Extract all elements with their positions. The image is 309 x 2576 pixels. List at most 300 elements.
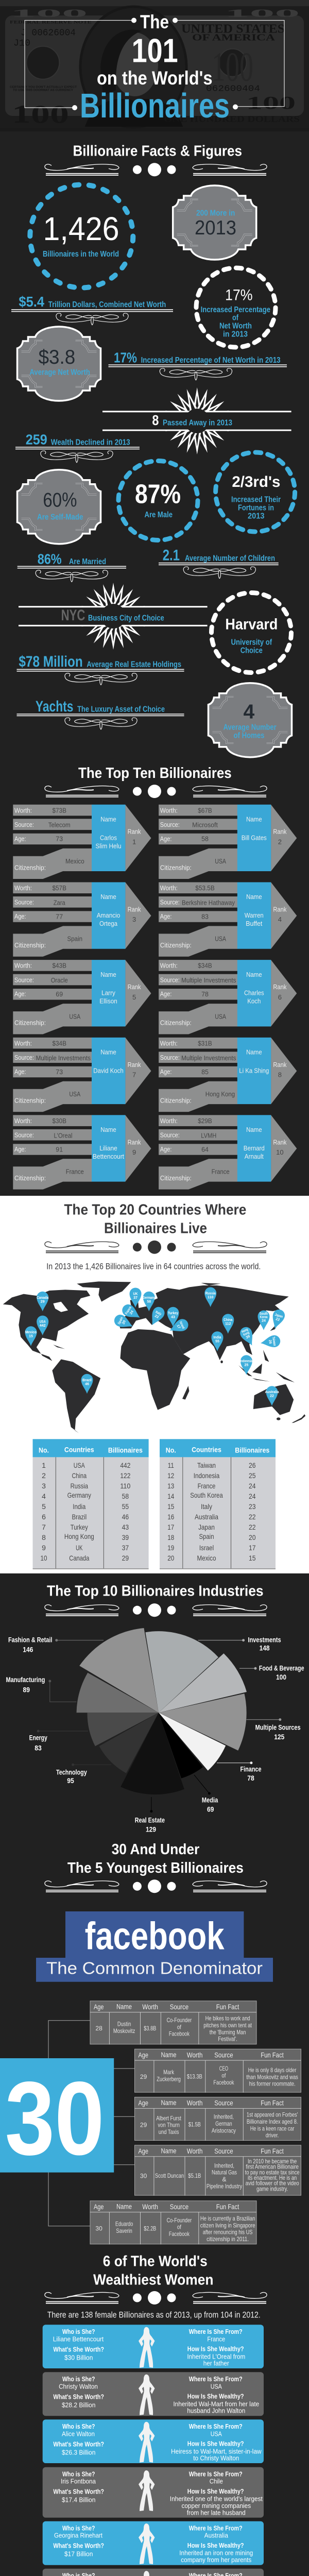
table: Scott Duncan: Age [138,2147,148,2155]
table: Mark Zuckerberg: Zuckerberg [157,2075,181,2082]
card: rank 5 Larry Ellison: 69 [56,990,63,998]
wedge: Multiple Sources [159,1693,247,1751]
table: countries 11-20: 25 [249,1471,256,1480]
fact: 17% increased: 17% [114,349,137,365]
ring: 17%: Increased Percentage [201,306,270,314]
fact: 86% married: 86% [38,551,62,567]
plaque: 200 more in 2013: 200 More in [196,209,235,217]
card: rank 5 Larry Ellison: $43B [52,962,66,970]
row: Iris Fontbona: $17.4 Billion [62,2496,95,2504]
pie labels: Media [202,1795,218,1804]
table: countries 11-20: No. [166,1446,176,1454]
row: Liliane Bettencourt: $30 Billion [64,2353,93,2361]
pin: Hong Kong: 39 [246,1334,251,1340]
leader lines [38,1640,280,1811]
row: Georgina Rinehart: $17 Billion [64,2550,93,2558]
row: Georgina Rinehart: Who is She? [62,2524,95,2532]
card: rank 10 Bernard Arnault: 64 [201,1145,209,1153]
card: rank 5 Larry Ellison: Source: [14,976,34,984]
pin: USA [37,1316,48,1335]
banner: dollar bill with title: UNITED STATES [181,22,285,36]
big 30 block: 30 [5,2060,105,2177]
card: rank 7 David Koch: Worth: [14,1039,32,1047]
burst: 8 passed away: Passed Away in 2013 [163,419,232,428]
ring: 2/3rd's increased: Increased Their [231,495,281,504]
table: Scott Duncan: Inherited, [214,2162,234,2169]
table: Dustin Moskovitz: Festival'. [218,2036,237,2043]
row: Georgina Rinehart: Where Is She From? [189,2524,243,2532]
card: rank 7 David Koch [13,1038,151,1112]
pie labels: Technology [56,1768,87,1776]
card: rank 1 Carlos Slim Helu: Mexico [65,857,84,865]
card: rank 1 Carlos Slim Helu: Citizenship: [14,863,46,871]
plaque: 60% self-made: Are Self-Made [37,513,83,521]
pin: Spain: 20 [122,1320,127,1325]
world map [3,1281,305,1433]
table: Mark Zuckerberg: $13.3B [187,2073,202,2080]
card: rank 6 Charles Koch: 78 [201,990,209,998]
card: rank 1 Carlos Slim Helu: Telecom [48,821,71,829]
table: countries 1-10: Countries [64,1445,94,1453]
card: rank 4 Warren Buffet: Warren [245,911,264,919]
card: rank 7 David Koch: Name [100,1048,116,1056]
card: rank 6 Charles Koch: $34B [198,962,212,970]
pin: USA: 442 [40,1324,46,1328]
ring: 17%: of [232,314,239,323]
banner: dollar bill with title: 100 [246,93,296,113]
table: countries 1-10: 1 [42,1461,46,1469]
table: countries 11-20: 24 [249,1492,256,1500]
pin: Brazil: Brazil [82,1379,92,1382]
card: rank 6 Charles Koch: Multiple Investments [181,976,236,984]
pin: Germany: 58 [147,1300,151,1303]
table: countries 1-10: 37 [122,1544,129,1552]
card: rank 8 Li Ka Shing: Worth: [160,1039,178,1047]
pie labels: 146 [23,1646,33,1654]
card: rank 6 Charles Koch: Source: [160,976,180,984]
card: rank 4 Warren Buffet: Name [246,893,262,901]
card: rank 9 Liliane Bettencourt [13,1115,151,1190]
row: Alice Walton: Alice Walton [62,2430,95,2437]
card: rank 6 Charles Koch [159,960,297,1034]
table: Dustin Moskovitz: He bikes to work and [205,2015,250,2022]
pie labels: Investments [248,1636,281,1644]
row: Georgina Rinehart [43,2521,264,2565]
card: rank 10 Bernard Arnault: Bernard [244,1144,265,1152]
card: rank 6 Charles Koch: Charles [244,989,264,997]
burst: NYC [19,583,208,650]
pin: UK [130,1288,141,1308]
card: rank 6 Charles Koch: Rank [273,983,287,991]
row: Christy Walton: $28.2 Billion [62,2401,95,2409]
ring: 1,426 billionaires [30,184,133,287]
card: rank 8 Li Ka Shing: Citizenship: [160,1096,192,1104]
table: Dustin Moskovitz: pitches his own tent at [203,2022,252,2029]
table: countries 1-10: India [73,1502,85,1511]
row: Liliane Bettencourt: What's She Worth? [53,2345,104,2353]
card: rank 1 Carlos Slim Helu: 73 [56,835,63,843]
table: Eduardo Saverin: 30 [95,2225,102,2232]
pin: Russia: Russia [205,1292,216,1295]
card: rank 10 Bernard Arnault: Age: [160,1145,171,1153]
pin: Turkey [167,1307,179,1327]
pie labels: 69 [207,1805,214,1814]
pie labels: 148 [260,1643,270,1652]
table: Eduardo Saverin: Saverin [116,2227,132,2234]
pie labels: 129 [146,1825,156,1834]
card: rank 3 Amancio Ortega: Age: [14,912,26,920]
fact: 259 wealth declined: 259 [26,432,47,448]
banner: dollar bill with title: J10 [13,38,30,48]
table: Scott Duncan: Fun Fact [261,2147,284,2155]
table: countries 11-20: 11 [168,1461,174,1469]
row: Iris Fontbona [43,2467,264,2518]
card: rank 6 Charles Koch: 6 [278,993,282,1001]
table: Mark Zuckerberg: Name [161,2050,177,2059]
fact: 17% increased [108,349,287,380]
row: Georgina Rinehart: company from her parents [181,2556,252,2564]
table: Eduardo Saverin: Fun Fact [216,2202,239,2211]
table: Eduardo Saverin: Source [170,2202,188,2211]
row: Iris Fontbona: Iris Fontbona [61,2478,96,2485]
ornament divider [45,785,267,798]
heading: 30 and under [67,1841,244,1876]
wedge: Food & Beverage [159,1653,247,1713]
banner: dollar bill with title: 100 [212,45,253,90]
row: Christy Walton: Inherited Wal-Mart from her late [173,2400,259,2408]
card: rank 8 Li Ka Shing: Hong Kong [205,1090,235,1098]
heading: The Top Ten Billionaires: The Top Ten Billionaires [78,765,232,782]
pin: China: 112 [225,1323,231,1326]
fact: $78 million [16,653,184,685]
table: countries 11-20 [160,1439,276,1569]
pin: Indonesia [241,1355,252,1375]
pin: Australia: 22 [270,1395,274,1398]
fact: 2.1 children [159,547,279,579]
pin: Japan: Japan [274,1313,283,1319]
pin: Spain: Spain [117,1316,124,1325]
fact: 2.1 children: Average Number of Children [185,554,275,563]
table: Mark Zuckerberg: Fun Fact [261,2050,284,2059]
card: rank 4 Warren Buffet: Rank [273,905,287,913]
table: Albert von Thurn und Taxis: He is a keen race car [250,2125,294,2132]
fact: 2.1 children: 2.1 [163,547,180,564]
table: Albert von Thurn und Taxis: Aristocracy [212,2127,236,2134]
table: Scott Duncan: $5.1B [188,2172,201,2179]
row: Christy Walton: Christy Walton [59,2382,98,2390]
pin: South Korea: South [260,1312,268,1316]
table: Albert von Thurn und Taxis: Name [161,2098,177,2107]
card: rank 1 Carlos Slim Helu: Worth: [14,806,32,814]
card: rank 9 Liliane Bettencourt: $30B [52,1117,66,1125]
fact: $5.4 trillion [11,294,173,325]
card: rank 9 Liliane Bettencourt: Liliane [99,1144,117,1152]
table: Dustin Moskovitz: Fun Fact [216,2003,239,2011]
pie labels: 125 [274,1733,284,1741]
table: Albert von Thurn und Taxis: Inherited, [214,2113,234,2121]
table: countries 1-10: China [72,1471,87,1480]
table: countries 1-10: 58 [122,1492,129,1500]
table: Scott Duncan: Name [161,2146,177,2155]
ring: 17%: 17% [225,287,253,304]
table: countries 1-10: Billionaires [108,1446,143,1454]
pin: Israel: 17 [176,1324,181,1329]
heading: 30 and under: The 5 Youngest Billionaires [67,1860,244,1876]
card: rank 3 Amancio Ortega: Name [100,893,116,901]
table: Dustin Moskovitz: Source [170,2003,188,2011]
plaque: $3.8 [18,327,101,401]
row: Liliane Bettencourt: Liliane Bettencourt [53,2335,104,2343]
table: Dustin Moskovitz: Co-Founder [167,2016,192,2024]
bill portrait [80,7,186,127]
heading: wealthiest women: Wealthiest Women [93,2272,213,2288]
table: Mark Zuckerberg: Facebook [213,2079,234,2086]
pin: Hong Kong: Hong [241,1328,249,1334]
table: Eduardo Saverin: citizen living in Singapore [200,2222,255,2229]
table: Albert von Thurn und Taxis: Source [214,2099,233,2107]
row: Liliane Bettencourt: Where Is She From? [189,2328,243,2335]
table: countries 1-10: UK [76,1544,83,1552]
table: countries 11-20: 15 [249,1554,256,1562]
burst: 8 passed away: 8 [152,412,159,428]
pie labels: Manufacturing [6,1675,45,1684]
pin: South Korea: 24 [262,1319,266,1323]
card: rank 1 Carlos Slim Helu: Carlos [100,834,117,841]
card: rank 7 David Koch: Multiple Investments [36,1054,91,1062]
card: rank 8 Li Ka Shing: $31B [198,1039,212,1047]
bill seal left [26,46,59,79]
table: countries 1-10: 9 [42,1544,46,1552]
table: Dustin Moskovitz: Dustin [117,2021,131,2028]
row: Alice Walton: USA [211,2430,222,2437]
table: countries 1-10: Germany [67,1491,91,1499]
card: rank 4 Warren Buffet: Age: [160,912,171,920]
table: countries 11-20: Billionaires [235,1446,269,1454]
pin: Indonesia: Indonesia [241,1360,252,1363]
table: Eduardo Saverin: $2.2B [144,2225,156,2232]
banner: dollar bill with title: 100 [225,7,300,20]
pin: Brazil [81,1374,93,1394]
row: Georgina Rinehart: What's She Worth? [53,2542,104,2550]
ring: 17%: Net Worth [219,322,252,331]
table: Scott Duncan: Worth [187,2147,202,2155]
card: rank 9 Liliane Bettencourt: 9 [132,1148,136,1156]
row: Alice Walton: Who is She? [62,2422,95,2430]
ornament divider [45,163,267,176]
heading: top 10 industries: The Top 10 Billionaires Industries [47,1583,264,1600]
card: rank 4 Warren Buffet: Worth: [160,884,178,892]
pin: France: 24 [129,1310,134,1315]
table: countries 11-20: Mexico [197,1554,216,1562]
card: rank 3 Amancio Ortega: Worth: [14,884,32,892]
table: Scott Duncan [134,2145,301,2196]
pin: France: France [125,1306,132,1315]
fact: $5.4 trillion: Trillion Dollars, Combined Net Worth [48,300,166,309]
table: Dustin Moskovitz: Name [116,2003,132,2011]
table: countries 1-10: 10 [40,1554,47,1562]
table: Eduardo Saverin: citizenship in 2011. [207,2235,249,2243]
facebook logo banner: The Common Denominator [46,1959,263,1978]
card: rank 3 Amancio Ortega: Amancio [97,911,120,919]
card: rank 8 Li Ka Shing: Name [246,1048,262,1056]
card: rank 1 Carlos Slim Helu: Slim Helu [95,842,121,850]
plaque: 4 homes: 4 [243,701,254,723]
table: Dustin Moskovitz: Age [94,2003,104,2011]
card: rank 3 Amancio Ortega: Spain [67,935,82,943]
table: Mark Zuckerberg: Mark [163,2069,175,2076]
card: rank 8 Li Ka Shing: Multiple Investments [181,1054,236,1062]
ornament divider [45,1879,267,1893]
table: countries 1-10: Hong Kong [64,1532,94,1540]
table: Eduardo Saverin: Worth [142,2202,158,2211]
row: Iris Fontbona: Chile [210,2478,223,2485]
row: Christy Walton [43,2372,264,2416]
fact: yachts: Yachts [36,698,73,715]
intro text: There are 138 female Billionaires as of 2013, up from 104 in 2012. [47,2310,261,2319]
pin: Japan: 22 [275,1317,280,1322]
pin: Italy [147,1305,167,1328]
card: rank 10 Bernard Arnault: France [212,1168,230,1176]
card: rank 8 Li Ka Shing: Li Ka Shing [239,1066,269,1074]
row: Liliane Bettencourt [43,2325,264,2368]
pie labels: 89 [23,1685,30,1693]
table: Scott Duncan: & [222,2176,227,2183]
pin: China [222,1314,234,1334]
wedge: Manufacturing [76,1673,159,1713]
fact: yachts [16,698,184,730]
pin: France [120,1302,143,1323]
pin: Spain [112,1313,135,1332]
table: Scott Duncan: 30 [140,2173,147,2180]
pin: South Korea: Korea [260,1316,268,1319]
ring: 87% male [118,461,198,540]
card: rank 8 Li Ka Shing: Source: [160,1054,180,1061]
card: rank 1 Carlos Slim Helu: Rank [128,828,141,836]
banner: dollar bill with title [0,0,309,131]
pin: Mexico: 15 [29,1335,33,1338]
table: Mark Zuckerberg: Age [138,2050,148,2059]
title: The [140,11,169,32]
table: countries 11-20: 16 [167,1513,174,1521]
banner: dollar bill with title: CERTAINLY YOU DON'T ACTUALLY EXPECT [10,86,77,89]
card: rank 10 Bernard Arnault: Rank [273,1138,287,1146]
row: Georgina Rinehart: Inherited an iron ore mining [179,2549,253,2557]
card: rank 2 Bill Gates: Bill Gates [242,834,267,841]
row: Alice Walton: What's She Worth? [53,2440,104,2448]
ring: 1,426 billionaires: Billionaires in the World [43,250,119,259]
card: rank 2 Bill Gates: USA [215,857,226,865]
plaque: 4 homes: Average Number [224,723,277,732]
table: countries 1-10: 122 [120,1471,131,1480]
wedge: Technology [99,1713,159,1773]
pin: Germany: Germany [143,1296,155,1300]
card: rank 5 Larry Ellison: 5 [132,993,136,1001]
bill seal right [219,49,247,77]
pin: UK: 37 [133,1296,138,1300]
pin: Israel: Israel [179,1321,185,1329]
table: countries 11-20: 17 [249,1544,256,1552]
ring: 2/3rd's increased: Fortunes in [238,504,274,513]
plaque: 60% self-made [18,470,101,544]
row: Christy Walton: husband John Walton [187,2407,245,2415]
row: Christy Walton: Where Is She From? [189,2375,243,2383]
card: rank 3 Amancio Ortega: Source: [14,899,34,906]
pin: Brazil: 46 [85,1382,89,1386]
pin: Russia [204,1287,216,1307]
table: countries 11-20: France [198,1482,216,1490]
pin: Australia [265,1386,279,1406]
burst: NYC: Business City of Choice [88,614,164,622]
row: Iris Fontbona: Who is She? [62,2470,95,2478]
card: rank 5 Larry Ellison: USA [69,1012,80,1020]
pin: Japan [269,1308,286,1330]
table: countries 1-10: Russia [71,1482,88,1490]
table: Eduardo Saverin: Age [94,2202,104,2211]
banner: dollar bill with title: 100 [10,7,88,20]
card: rank 6 Charles Koch: Name [246,971,262,978]
card: rank 3 Amancio Ortega: 3 [132,916,136,923]
card: rank 9 Liliane Bettencourt: Age: [14,1145,26,1153]
banner: dollar bill with title: 100 [12,99,69,128]
card: rank 3 Amancio Ortega: $57B [52,884,66,892]
fact: 17% increased: Increased Percentage of Net Worth in 2013 [141,356,281,365]
heading: Billionaire Facts & Figures: Billionaire Facts & Figures [73,143,242,160]
table: Albert von Thurn und Taxis: Fun Fact [261,2099,284,2107]
table: countries 1-10: 7 [42,1523,46,1531]
card: rank 1 Carlos Slim Helu: Name [100,815,116,823]
pie labels: Finance [240,1765,262,1773]
row: Alice Walton: Where Is She From? [189,2422,243,2430]
card: rank 6 Charles Koch: Koch [247,997,261,1005]
row: Iris Fontbona: Inherited one of the world's largest [170,2495,263,2503]
wedge: Investments [145,1631,218,1713]
table: countries 11-20: 22 [249,1513,256,1521]
table: countries 11-20: Countries [192,1445,221,1453]
card: rank 10 Bernard Arnault: Name [246,1126,262,1133]
table: Dustin Moskovitz [90,2001,256,2044]
card: rank 6 Charles Koch: USA [215,1012,226,1020]
table: countries 1-10: 110 [120,1482,131,1490]
card: rank 2 Bill Gates: Name [246,815,262,823]
pin: Taiwan [260,1334,281,1349]
card: rank 1 Carlos Slim Helu: Source: [14,821,34,828]
card: rank 9 Liliane Bettencourt: Source: [14,1131,34,1139]
fact: 259 wealth declined: Wealth Declined in 2013 [51,438,130,447]
table: Mark Zuckerberg [134,2049,301,2093]
table: Albert von Thurn und Taxis: German [215,2120,232,2127]
pin: Indonesia: 25 [245,1364,248,1367]
table: Albert von Thurn und Taxis: Age [138,2099,148,2107]
card: rank 9 Liliane Bettencourt: L'Oreal [54,1131,73,1139]
wedge: Fashion & Retail [79,1628,159,1713]
table: countries 11-20: Spain [199,1532,214,1540]
row: Georgina Rinehart: Georgina Rinehart [54,2532,102,2539]
table: countries 11-20: 14 [167,1492,174,1500]
heading: top 20 countries [64,1202,246,1236]
table: countries 1-10: 2 [42,1471,46,1480]
card: rank 4 Warren Buffet: Berkshire Hathaway [182,899,235,906]
ring: 1,426 billionaires: 1,426 [43,210,119,247]
card: rank 5 Larry Ellison: Rank [128,983,141,991]
table: Mark Zuckerberg: He is only 8 days older [248,2066,297,2074]
pin: India: India [213,1336,221,1340]
table: countries 1-10: 46 [122,1513,129,1521]
card: rank 8 Li Ka Shing: Age: [160,1067,171,1075]
card: rank 1 Carlos Slim Helu: $73B [52,806,66,814]
plaque: 4 homes [208,683,291,757]
table: Scott Duncan: Scott Duncan [155,2172,184,2179]
card: rank 2 Bill Gates: $67B [198,806,212,814]
